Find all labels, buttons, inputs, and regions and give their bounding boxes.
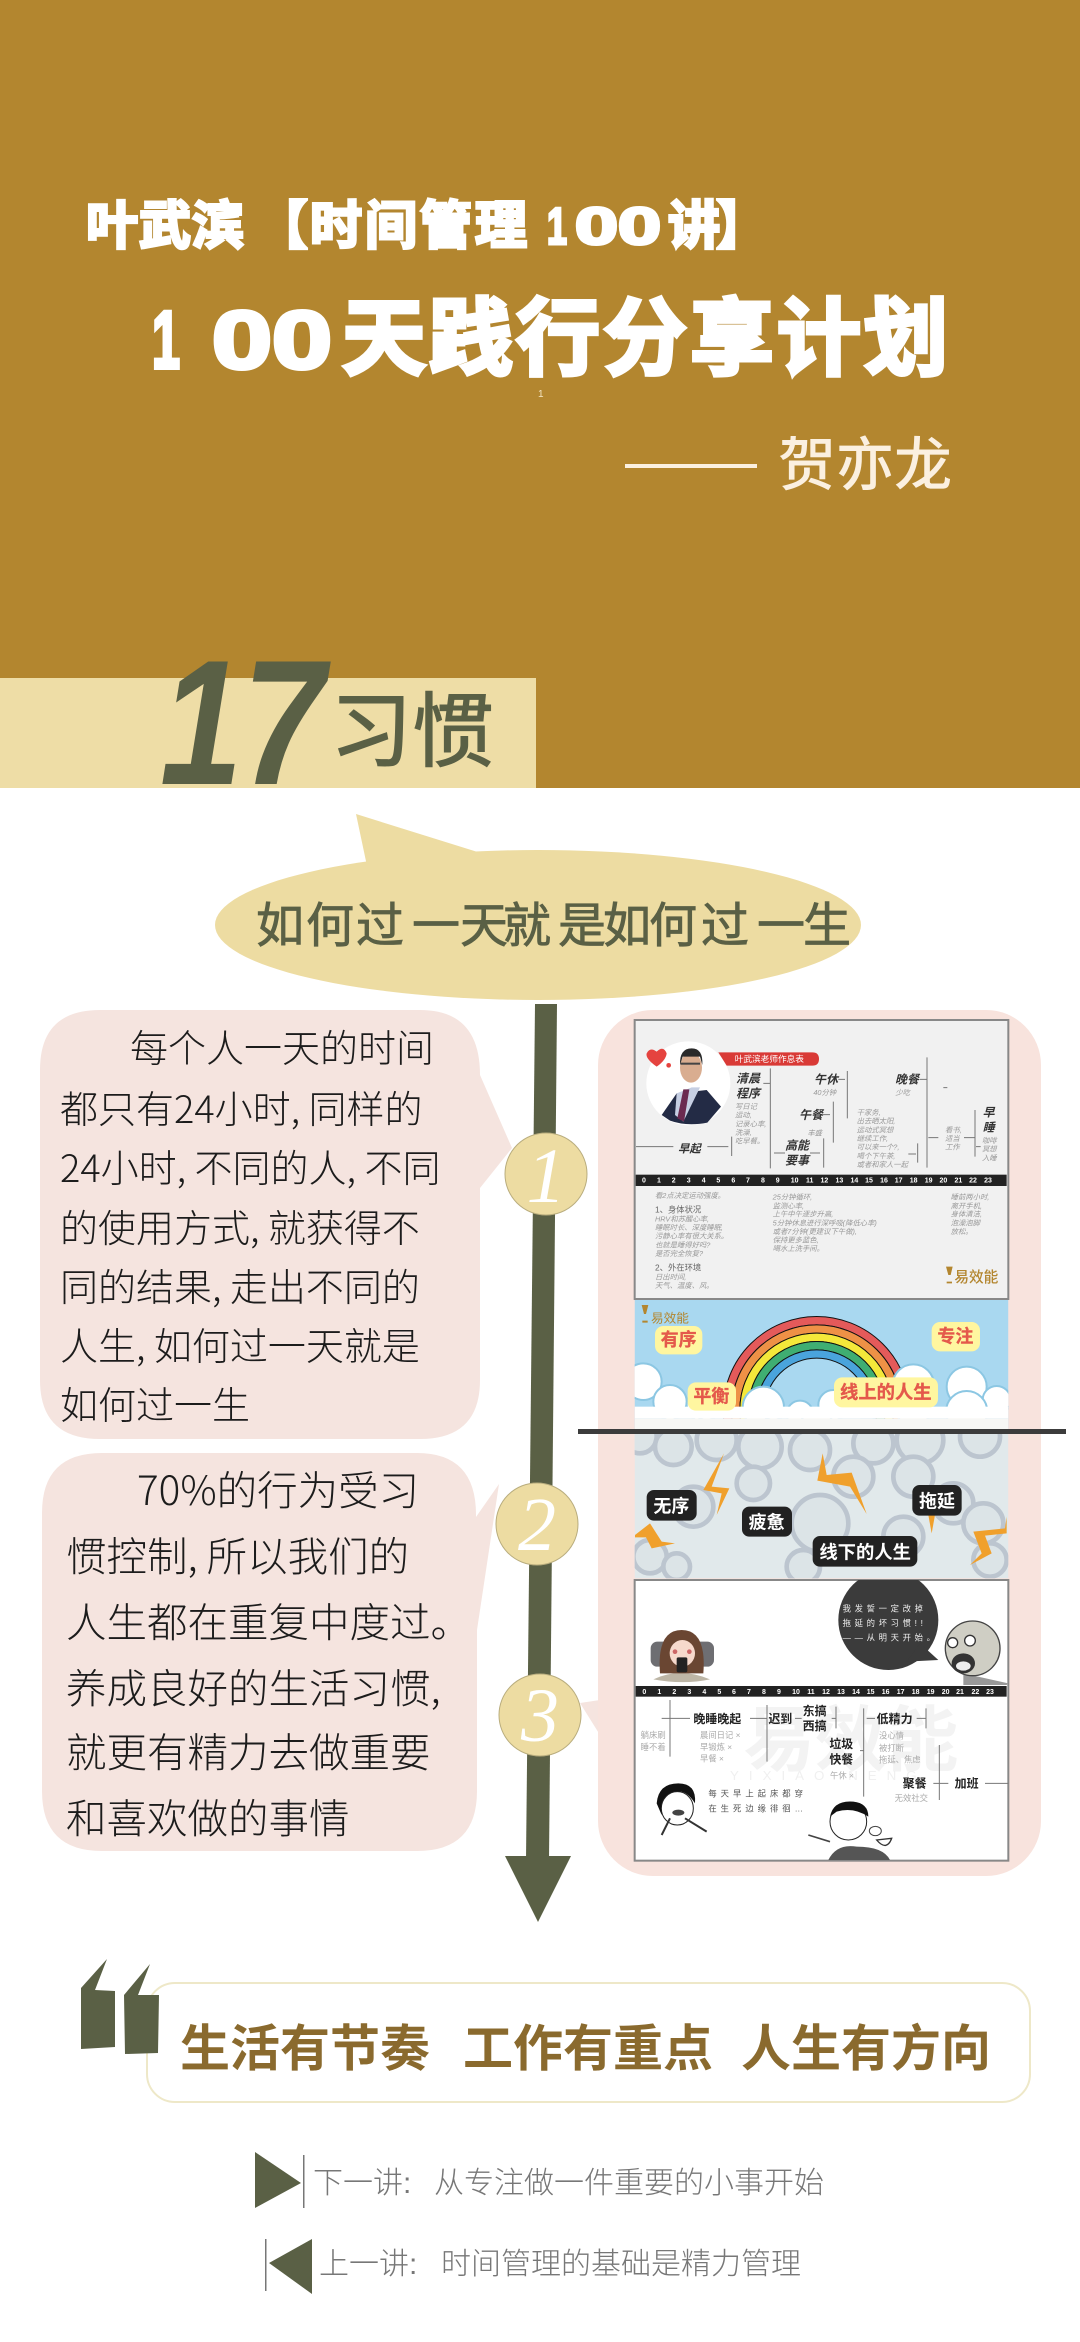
hour ruler: 11 [806, 1178, 813, 1185]
schedule title pill: 叶武滨老师作息表 [735, 1053, 804, 1064]
noon labels: 出去晒太阳, [857, 1117, 895, 1126]
hour ruler: 17 [897, 1689, 905, 1696]
panel: life above the line [634, 1300, 1008, 1429]
girl in bed [651, 1630, 714, 1682]
schedule labels: 低精力 [877, 1711, 913, 1726]
schedule labels: 躺床刷 [641, 1730, 666, 1740]
hour ruler: 18 [912, 1689, 920, 1696]
speech bubble: headline [215, 814, 861, 1000]
evening labels: 晚餐 [895, 1072, 921, 1086]
quote mark [81, 1959, 159, 2054]
notes column 1: 是否完全恢复? [655, 1249, 704, 1258]
tag: disorder: 无序 [653, 1495, 689, 1516]
schedule labels: 早餐 × [700, 1754, 724, 1764]
hour ruler: 23 [986, 1689, 994, 1696]
tag: balance: 平衡 [693, 1386, 729, 1406]
schedule labels: 没心情 [879, 1731, 904, 1741]
text panel 1: 都只有24小时, 同样的 [60, 1079, 423, 1134]
hour ruler: 22 [971, 1689, 979, 1696]
hour ruler: 19 [925, 1178, 933, 1185]
title line 2: 00 [212, 295, 332, 386]
notes column 2: 喝水上洗手间。 [773, 1244, 824, 1253]
noon labels: 丰盛 [807, 1129, 824, 1138]
title line 1: 00 [575, 198, 661, 256]
conclusion box [147, 1983, 1030, 2102]
speech balloon: 我发誓一定改掉 [843, 1603, 927, 1613]
schedule labels: 垃圾 [829, 1736, 853, 1751]
notes column 1: 看2点决定运动强度。 [655, 1191, 725, 1200]
evening labels: 早 [983, 1106, 996, 1120]
notes column 2: 5分钟休息进行深呼吸(降低心率) [773, 1218, 877, 1227]
hour ruler: 12 [822, 1689, 830, 1696]
notes column 1: 2、外在环境 [655, 1262, 701, 1272]
next lesson link [255, 2152, 824, 2208]
notes column 2: 25分钟循环, [772, 1193, 812, 1202]
conclusion box: 工作有重点 [463, 2021, 713, 2077]
hour ruler: 12 [820, 1178, 828, 1185]
evening labels: 少吃 [895, 1088, 912, 1097]
title line 1: 讲】 [668, 198, 768, 256]
noon labels: 或者和家人一起 [857, 1160, 910, 1169]
morning labels: 清晨 [736, 1071, 761, 1085]
notes column 2: 上午中午逐步升高, [773, 1210, 833, 1219]
hour ruler: 7 [747, 1689, 751, 1696]
next lesson link: 下一讲: [313, 2167, 411, 2200]
hour ruler: 16 [880, 1178, 888, 1185]
angry character [945, 1621, 1008, 1685]
schedule labels: 午休 × [830, 1771, 854, 1781]
evening labels: 睡 [983, 1121, 997, 1135]
schedule labels: 早锻炼 × [700, 1742, 732, 1752]
rainbow [723, 1316, 900, 1418]
hour ruler: 9 [777, 1689, 781, 1696]
tag: procrastination [912, 1485, 962, 1516]
notes column 1: 天气、温度、风。 [655, 1281, 714, 1290]
text panel 1: 人生, 如何过一天就是 [60, 1316, 420, 1371]
lightning bolts [635, 1453, 1007, 1565]
notes column 3: 离开手机, [951, 1201, 982, 1210]
tag: orderly: 有序 [661, 1329, 697, 1350]
caption: 每天早上起床都穿 [708, 1789, 807, 1799]
evening labels: 入睡 [982, 1153, 997, 1162]
title line 1: 叶武滨【时间管理 [86, 198, 527, 256]
panel: image column background [598, 1010, 1041, 1876]
previous lesson link: 上一讲: [319, 2248, 417, 2281]
morning labels: 程序 [736, 1086, 762, 1100]
speech balloon [838, 1570, 939, 1670]
notes column 3: 睡前两小时, [951, 1193, 989, 1202]
notes column 1: 日出时间, [655, 1272, 686, 1281]
hour ruler: 7 [746, 1178, 750, 1185]
logo [946, 1267, 999, 1286]
hour ruler: 11 [807, 1689, 815, 1696]
tag: fatigue [742, 1507, 792, 1537]
morning labels: 高能 [785, 1139, 811, 1153]
text panel 2: 70%的行为受习 [137, 1458, 419, 1517]
text panel 1: 同的结果, 走出不同的 [60, 1257, 420, 1312]
evening labels: 工作 [945, 1143, 961, 1152]
morning labels [678, 1071, 811, 1168]
schedule labels: 晚睡晚起 [693, 1711, 741, 1726]
notes column 1: HRV和苏醒心率, [655, 1214, 709, 1223]
hour ruler: 8 [761, 1178, 765, 1185]
hour ruler: 5 [716, 1178, 720, 1185]
lesson title: 习惯 [330, 687, 494, 778]
hour ruler: 15 [867, 1689, 875, 1696]
evening labels [895, 1072, 998, 1162]
evening labels: 咖啡 [982, 1136, 998, 1145]
notes column 1 [655, 1191, 728, 1290]
noon labels: 可以来一个?, [857, 1143, 899, 1152]
text panel 2 [42, 1453, 499, 1851]
schedule labels: 聚餐 [903, 1775, 927, 1790]
hour ruler: 8 [762, 1689, 766, 1696]
panel: life below the line [634, 1434, 1008, 1578]
hour ruler [636, 1686, 1007, 1697]
evening labels: 看书, [945, 1125, 962, 1134]
notes column 1: 1、身体状况 [655, 1205, 702, 1215]
previous lesson link [265, 2239, 801, 2294]
hour ruler [636, 1175, 1007, 1186]
hour ruler: 20 [942, 1689, 950, 1696]
conclusion box: 人生有方向 [741, 2021, 991, 2077]
title line 1 [86, 198, 768, 256]
hour ruler: 21 [956, 1689, 964, 1696]
author line: 贺亦龙 [778, 433, 952, 498]
watermark: 易效能 [743, 1701, 958, 1781]
step circle 3 [499, 1674, 600, 1758]
tag: life above the line: 线上的人生 [840, 1382, 932, 1403]
previous lesson link: 时间管理的基础是精力管理 [441, 2248, 801, 2281]
logo: 易效能 [651, 1311, 689, 1325]
noon labels: 午休 [814, 1072, 840, 1086]
hour ruler: 6 [732, 1689, 736, 1696]
noon labels: 喝个下午茶, [857, 1151, 895, 1160]
clouds [634, 1362, 1008, 1429]
hour ruler: 2 [672, 1689, 676, 1696]
notes column 2: 或者7分钟(更建议下午做), [773, 1227, 857, 1236]
hour ruler: 19 [927, 1689, 935, 1696]
hour ruler: 18 [910, 1178, 918, 1185]
schedule title pill [718, 1052, 819, 1066]
schedule labels: 拖延、焦虑 [879, 1755, 921, 1765]
noon labels: 干家务, [857, 1108, 881, 1117]
hour ruler: 13 [837, 1689, 845, 1696]
hour ruler: 2 [672, 1178, 676, 1185]
schedule labels: 西搞 [803, 1718, 827, 1733]
caption [708, 1789, 807, 1813]
noon labels [799, 1072, 910, 1169]
text panel 1 [40, 1010, 512, 1439]
hour ruler: 17 [895, 1178, 903, 1185]
notes column 1: 也就是睡得好吗? [655, 1240, 711, 1249]
timeline arrow [505, 1004, 571, 1922]
hour ruler: 23 [984, 1178, 992, 1185]
hour ruler: 4 [702, 1689, 706, 1696]
step circle 1: 1 [526, 1132, 566, 1219]
evening labels: 适当 [945, 1134, 960, 1143]
schedule labels: 迟到 [768, 1712, 792, 1726]
watermark: YIXIAO NENG [730, 1768, 927, 1783]
text panel 2: 就更有精力去做重要 [66, 1720, 430, 1779]
step circle 1 [505, 1132, 587, 1219]
morning labels: 要事 [785, 1154, 811, 1168]
hour ruler: 14 [852, 1689, 860, 1696]
text panel 2: 和喜欢做的事情 [66, 1786, 350, 1845]
text panel 1: 24小时, 不同的人, 不同 [60, 1138, 440, 1193]
logo [642, 1305, 689, 1325]
step circle 2 [496, 1483, 578, 1567]
morning labels: 吃早餐。 [735, 1137, 764, 1146]
hour ruler: 4 [702, 1178, 706, 1185]
hour ruler: 10 [792, 1689, 800, 1696]
hour ruler: 20 [939, 1178, 947, 1185]
text panel 1: 如何过一生 [60, 1375, 250, 1430]
hour ruler: 0 [642, 1178, 646, 1185]
lesson number: 17 [160, 623, 331, 822]
tag: focus: 专注 [937, 1326, 973, 1347]
speech balloon: 拖延的坏习惯!! [843, 1618, 927, 1628]
morning labels: 早起 [678, 1143, 702, 1156]
notes column 3 [951, 1193, 989, 1236]
text panel 1: 每个人一天的时间 [130, 1018, 434, 1073]
storm clouds [634, 1434, 1008, 1578]
morning labels: 运动, [735, 1111, 752, 1120]
hour ruler: 1 [657, 1178, 661, 1185]
schedule labels: 睡不着 [641, 1742, 666, 1752]
header panel [0, 0, 1080, 822]
caption: 在生死边缘徘徊… [708, 1803, 807, 1813]
panel: schedule of Ye Wubin [635, 1020, 1008, 1299]
divider line between upper and lower life [578, 1429, 1066, 1434]
hour ruler: 13 [835, 1178, 843, 1185]
hearts [646, 1049, 671, 1068]
tag: orderly [655, 1326, 702, 1354]
noon labels: 午餐 [799, 1108, 825, 1122]
crying character [657, 1783, 707, 1835]
author line [625, 433, 952, 498]
tag: life below the line [813, 1536, 917, 1567]
morning labels: 记录心率, [735, 1119, 766, 1128]
conclusion box: 生活有节奏 [180, 2021, 430, 2077]
notes column 3: 泡澡泡脚 [951, 1218, 982, 1227]
step circle 2: 2 [518, 1483, 556, 1567]
notes column 2 [772, 1193, 877, 1253]
next lesson link: 从专注做一件重要的小事开始 [434, 2167, 824, 2200]
tag: life above the line [834, 1377, 938, 1407]
tag: life below the line: 线下的人生 [819, 1541, 911, 1562]
notes column 2: 保持更多蓝色, [773, 1236, 819, 1245]
schedule labels: 快餐 [829, 1751, 853, 1766]
schedule labels: 被打断 [879, 1743, 904, 1753]
title line 2: 1 [152, 295, 180, 386]
notes column 3: 放松。 [951, 1227, 973, 1236]
eating character [808, 1802, 892, 1860]
hour ruler: 22 [969, 1178, 977, 1185]
hour ruler: 21 [954, 1178, 962, 1185]
notes column 2: 监测心率, [773, 1201, 804, 1210]
tag: focus [932, 1322, 980, 1351]
hour ruler: 10 [791, 1178, 799, 1185]
schedule labels: 东搞 [803, 1703, 827, 1718]
text panel 2: 养成良好的生活习惯, [66, 1656, 441, 1715]
logo: 易效能 [954, 1269, 999, 1286]
tag: balance [688, 1382, 736, 1411]
title line 2: 天践行分享计划 [342, 292, 948, 386]
speech balloon: ——从明天开始。 [843, 1633, 939, 1643]
text panel 1: 的使用方式, 就获得不 [60, 1198, 420, 1253]
page mark: 1 [538, 389, 544, 400]
lesson band [0, 678, 536, 788]
noon labels: 继续工作, [857, 1134, 888, 1143]
morning labels: 写日记 [735, 1102, 758, 1111]
hour ruler: 15 [865, 1178, 873, 1185]
hour ruler: 9 [776, 1178, 780, 1185]
hour ruler: 14 [850, 1178, 858, 1185]
noon labels: 运动式冥想 [857, 1125, 895, 1134]
text panel 2: 惯控制, 所以我们的 [66, 1524, 409, 1583]
hour ruler: 5 [717, 1689, 721, 1696]
morning labels: 洗澡, [735, 1128, 752, 1137]
panel: poor schedule [635, 1570, 1008, 1861]
schedule labels: 加班 [955, 1775, 979, 1790]
title line 1: 1 [547, 198, 567, 256]
hour ruler: 16 [882, 1689, 890, 1696]
schedule labels [641, 1703, 979, 1803]
schedule labels: 晨间日记 × [700, 1730, 741, 1740]
notes column 3: 身体清洁, [951, 1210, 982, 1219]
noon labels: 40分钟 [813, 1088, 838, 1097]
hour ruler: 6 [731, 1178, 735, 1185]
hour ruler: 3 [687, 1178, 691, 1185]
schedule labels: 无效社交 [895, 1793, 928, 1803]
portrait [646, 1041, 730, 1125]
hour ruler: 3 [687, 1689, 691, 1696]
hour ruler: 1 [657, 1689, 661, 1696]
speech bubble: headline: 如何过一天就是如何过一生 [256, 886, 851, 956]
evening labels: 冥想 [982, 1145, 998, 1154]
notes column 1: 睡眠时长、深度睡眠, [655, 1223, 723, 1232]
step circle 3: 3 [520, 1674, 559, 1758]
text panel 2: 人生都在重复中度过。 [66, 1590, 471, 1649]
hour ruler: 0 [642, 1689, 646, 1696]
notes column 1: 污静心率有很大关系。 [655, 1232, 728, 1241]
tag: fatigue: 疲惫 [749, 1512, 785, 1533]
tag: procrastination: 拖延 [919, 1491, 955, 1511]
tag: disorder [647, 1490, 697, 1521]
